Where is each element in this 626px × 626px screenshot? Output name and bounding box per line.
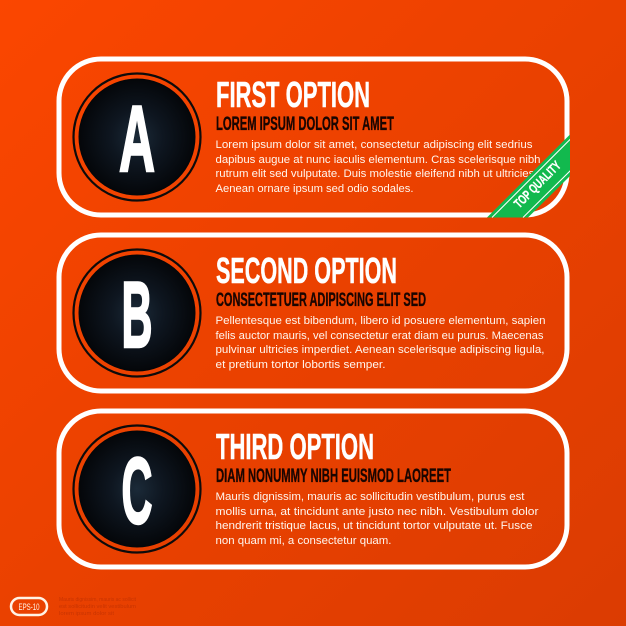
body text B: et pretium tortor lobortis semper. bbox=[216, 359, 386, 371]
body text A: rutrum elit sed vulputate. Duis molestie eleifend nibh ut ultricies. bbox=[216, 168, 538, 180]
heading: first option: FIRST OPTION bbox=[216, 74, 370, 115]
heading: third option: THIRD OPTION bbox=[216, 426, 374, 467]
ribbon: top quality: TOP QUALITY bbox=[511, 158, 564, 211]
icon: letter badge A bbox=[74, 74, 200, 200]
body text C: mollis urna, at tincidunt ante justo nec nibh. Vestibulum dolor bbox=[216, 506, 539, 518]
badge: EPS-10: EPS-10 bbox=[18, 602, 40, 613]
subheading C: DIAM NONUMMY NIBH EUISMOD LAOREET bbox=[216, 466, 451, 487]
body text A: Lorem ipsum dolor sit amet, consectetur adipiscing elit sedrius bbox=[216, 139, 533, 151]
body text C: Mauris dignissim, mauris ac sollicitudin vestibulum, purus est bbox=[216, 491, 525, 503]
icon: letter badge B bbox=[74, 250, 200, 376]
fine print bbox=[59, 597, 137, 617]
body text B: Pellentesque est bibendum, libero id posuere elementum, sapien bbox=[216, 315, 546, 327]
badge: EPS-10 bbox=[11, 598, 47, 615]
icon: letter badge B: B bbox=[122, 262, 152, 367]
body text B: felis auctor mauris, vel consectetur erat diam eu purus. Maecenas bbox=[216, 330, 544, 342]
body text B bbox=[216, 315, 546, 371]
icon: letter badge A: A bbox=[119, 86, 155, 191]
panel outline B bbox=[59, 235, 567, 391]
body text C bbox=[216, 491, 539, 547]
body text B: pulvinar ultricies imperdiet. Aenean scelerisque adipiscing ligula, bbox=[216, 344, 544, 356]
body text A bbox=[216, 139, 540, 195]
fine print: Mauris dignissim, mauris ac sollicit bbox=[59, 597, 137, 603]
panel: first option bbox=[59, 59, 567, 215]
panel outline C bbox=[59, 411, 567, 567]
subheading B: CONSECTETUER ADIPISCING ELIT SED bbox=[216, 290, 426, 311]
ribbon: top quality bbox=[487, 134, 571, 218]
panel: third option bbox=[59, 411, 567, 567]
body text C: non quam mi, a consectetur quam. bbox=[216, 535, 392, 547]
body text A: dapibus augue at nunc iaculis elementum. Cras scelerisque nibh bbox=[216, 154, 540, 166]
icon: letter badge C bbox=[74, 426, 200, 552]
body text C: hendrerit tristique lacus, ut tincidunt tortor vulputate ut. Fusce bbox=[216, 520, 532, 532]
fine print: est sollicitudin velit vestibulum bbox=[59, 604, 136, 610]
panel: second option bbox=[59, 235, 567, 391]
heading: second option: SECOND OPTION bbox=[216, 250, 397, 291]
fine print: lorem ipsum dolor sit bbox=[59, 611, 115, 617]
subheading A: LOREM IPSUM DOLOR SIT AMET bbox=[216, 114, 394, 135]
body text A: Aenean ornare ipsum sed odio sodales. bbox=[216, 183, 414, 195]
icon: letter badge C: C bbox=[122, 438, 152, 543]
panel outline A bbox=[59, 59, 567, 215]
